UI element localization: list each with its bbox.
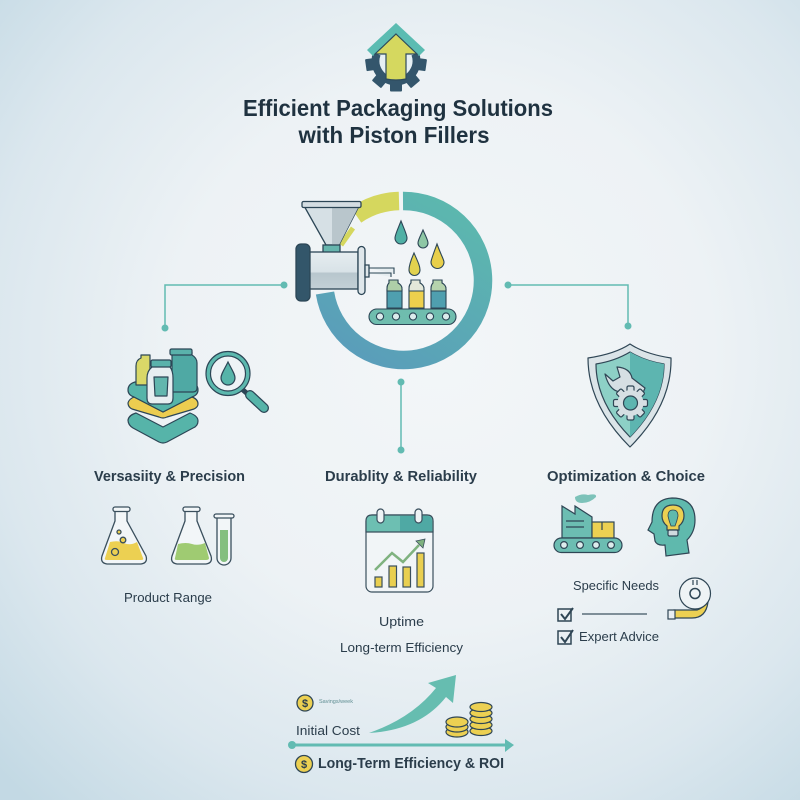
icon: head with light bulb bbox=[648, 498, 695, 556]
icon: logo arrow and gear bbox=[365, 23, 427, 92]
label: expert advice: Expert Advice bbox=[579, 630, 659, 644]
icon: factory on conveyor bbox=[554, 494, 622, 552]
icon: piston filler machine bbox=[296, 202, 394, 301]
chart: progress ring bbox=[325, 201, 483, 360]
icon: coin stacks bbox=[446, 702, 492, 737]
label: specific needs: Specific Needs bbox=[573, 579, 659, 593]
icon: checkbox one bbox=[558, 608, 573, 621]
icon: coin small: $ bbox=[302, 698, 308, 710]
icon: shield with wrench and gear bbox=[588, 344, 671, 447]
icon: flask yellow bbox=[102, 507, 146, 564]
icon: measuring tape bbox=[668, 578, 710, 619]
heading: optimization and choice: Optimization & Choice bbox=[547, 469, 705, 485]
icon: coin ROI: $ bbox=[301, 759, 307, 771]
icon: bottles on conveyor bbox=[369, 280, 456, 324]
icon: stacked layers with containers bbox=[128, 349, 198, 443]
icon: coin ROI bbox=[296, 756, 312, 772]
label: tiny caption: Savings/week bbox=[319, 699, 354, 705]
title: with Piston Fillers bbox=[298, 122, 490, 148]
label: long-term efficiency: Long-term Efficiency bbox=[340, 641, 464, 655]
icon: falling drops bbox=[395, 221, 444, 276]
label: uptime: Uptime bbox=[379, 615, 424, 629]
heading: versatility and precision: Versasiity & Precision bbox=[94, 469, 245, 485]
label: product range: Product Range bbox=[124, 591, 212, 605]
icon: checkbox two bbox=[558, 630, 573, 644]
icon: coin small bbox=[297, 695, 313, 711]
divider line: specific need bbox=[582, 613, 647, 615]
connector: left bbox=[162, 282, 288, 332]
label: long-term efficiency and ROI: Long-Term Efficiency & ROI bbox=[318, 755, 504, 772]
connector: right bbox=[504, 282, 632, 330]
icon: magnifier with drop bbox=[206, 352, 264, 408]
arrow: timeline bbox=[288, 739, 514, 752]
icon: calendar with growth chart bbox=[366, 509, 433, 592]
title bbox=[243, 95, 553, 148]
icon: flask green and test tube bbox=[172, 507, 234, 565]
connector: center bbox=[398, 378, 404, 454]
arrow: growth curve bbox=[369, 675, 456, 733]
heading: durability and reliability: Durablity & Reliability bbox=[325, 469, 477, 485]
label: initial cost: Initial Cost bbox=[296, 723, 360, 738]
title: Efficient Packaging Solutions bbox=[243, 95, 553, 121]
